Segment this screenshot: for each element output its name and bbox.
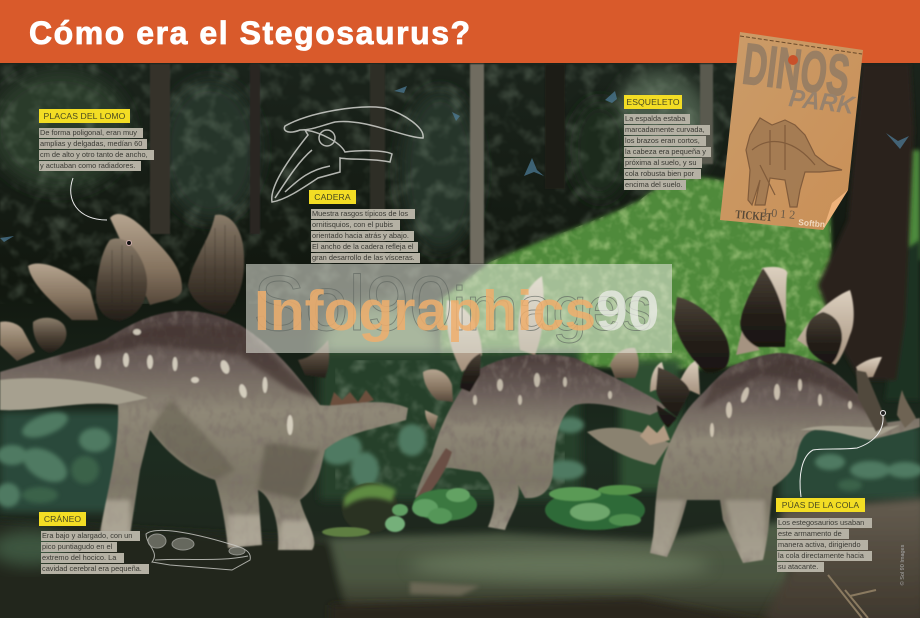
watermark orange text: Infographics90 — [254, 279, 659, 343]
text: Esqueleto: los brazos eran cortos, — [625, 136, 700, 145]
pointer line: tail spikes — [800, 410, 886, 497]
text: Placas del lomo: y actuaban como radiadores. — [40, 161, 135, 170]
foreground leaves — [0, 407, 920, 507]
text: Esqueleto: cola robusta bien por — [625, 169, 694, 178]
label: Púas de la cola: PÚAS DE LA COLA — [782, 500, 859, 510]
text: Cráneo: pico puntiagudo en el — [42, 542, 112, 551]
text: Cadera: orientado hacia atrás y abajo. — [312, 231, 409, 240]
fern clusters — [385, 485, 645, 532]
text: Púas de la cola: manera activa, dirigiendo — [778, 540, 861, 549]
pond water and banks — [0, 498, 920, 618]
text: Cráneo — [41, 531, 149, 574]
tree trunks — [150, 64, 713, 264]
label: Esqueleto: ESQUELETO — [626, 97, 680, 107]
dinosaur: left stegosaurus — [0, 214, 410, 555]
header band — [0, 0, 920, 63]
label: Placas del lomo — [39, 109, 130, 123]
text: Cadera: Muestra rasgos típicos de los — [312, 209, 408, 218]
text: Cadera: ornitisquios, con el pubis — [312, 220, 393, 229]
lower foliage — [0, 350, 920, 512]
text: Placas del lomo: amplias y delgadas, medían 60 — [40, 139, 142, 148]
text: Púas de la cola: Los estegosaurios usaban — [778, 518, 864, 527]
label: Cráneo — [39, 512, 86, 526]
pointer line: plates — [71, 178, 132, 246]
ticket: Dinos Park: TICKET — [735, 208, 774, 225]
text: Esqueleto: próxima al suelo, y su — [625, 158, 696, 167]
text: Púas de la cola: este armamento de — [778, 529, 842, 538]
text: Esqueleto: La espalda estaba — [625, 114, 685, 123]
dinosaur: middle stegosaurus — [410, 276, 670, 530]
label: Cráneo: CRÁNEO — [44, 514, 81, 524]
ticket: Dinos Park: 1012 — [762, 205, 799, 222]
text: Esqueleto: la cabeza era pequeña y — [625, 147, 706, 156]
text: Púas de la cola — [777, 518, 872, 572]
label: Placas del lomo: PLACAS DEL LOMO — [44, 111, 125, 121]
text: Placas del lomo: De forma poligonal, eran muy — [40, 128, 137, 137]
ticket: Dinos Park: Softbn — [798, 217, 826, 229]
title: Cómo era el Stegosaurus? — [29, 15, 472, 51]
mossy rock and moss — [322, 483, 398, 537]
ticket: Dinos Park: PARK — [787, 85, 858, 120]
label: Cadera — [309, 190, 356, 204]
text: Cráneo: cavidad cerebral era pequeña. — [42, 564, 142, 573]
large right tree — [818, 64, 920, 400]
bright green bushes — [320, 150, 920, 385]
text: Esqueleto — [624, 114, 711, 190]
text: Placas del lomo: cm de alto y otro tanto de ancho, — [40, 150, 148, 159]
label: Cadera: CADERA — [314, 192, 351, 202]
text: Cráneo: Era bajo y alargado, con un — [42, 531, 132, 540]
text: Esqueleto: marcadamente curvada, — [625, 125, 705, 134]
label: Púas de la cola — [776, 498, 865, 512]
dinosaur: right stegosaurus — [587, 267, 920, 565]
text: Esqueleto: encima del suelo. — [625, 180, 683, 189]
text: Púas de la cola: la cola directamente hacia — [778, 551, 864, 560]
text: Cráneo: extremo del hocico. La — [42, 553, 116, 562]
text: Placas del lomo — [39, 128, 154, 171]
image credit: © Sol 90 Images — [900, 545, 906, 585]
ticket: Dinos Park: DINOS — [739, 32, 853, 109]
pterosaurs in the distance — [0, 86, 909, 242]
label: Esqueleto — [624, 95, 682, 109]
hip bone sketch — [272, 107, 423, 202]
watermark outline text: Sol90images — [253, 259, 652, 347]
text: Cadera: El ancho de la cadera refleja el — [312, 242, 413, 251]
text: Púas de la cola: su atacante. — [778, 562, 818, 571]
text: Cadera: gran desarrollo de las vísceras. — [312, 253, 415, 262]
skull sketch — [146, 530, 250, 570]
text: Cadera — [311, 209, 420, 263]
